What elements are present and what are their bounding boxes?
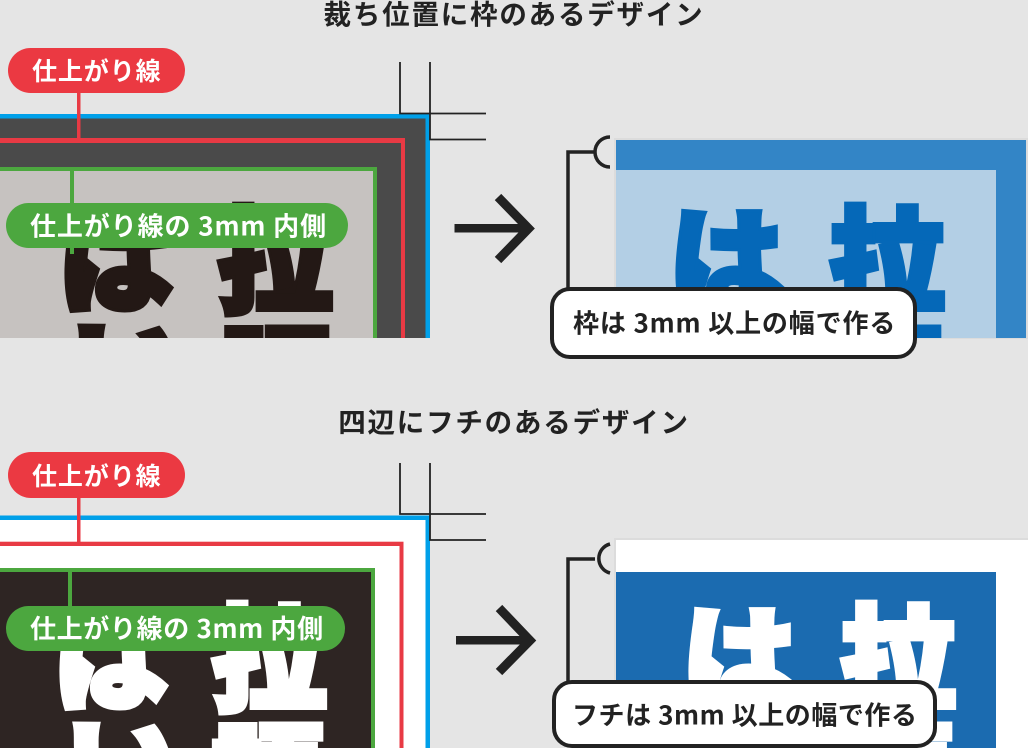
callout: top [552, 289, 915, 357]
large lettering: bottom sample [688, 600, 956, 748]
callout: top: 枠は 3mm 以上の幅で作る [573, 304, 896, 340]
arrow: bottom [456, 608, 530, 672]
panel: bottom artwork with bleed frame [0, 516, 430, 748]
label: red trim line bottom: 仕上がり線 [32, 457, 162, 493]
large lettering: top sample: 拉 [830, 171, 945, 337]
title: bottom heading: 四辺にフチのあるデザイン [338, 400, 690, 440]
panel: bottom finished sample [614, 538, 1028, 748]
large lettering: top sample: 語 [830, 291, 945, 457]
crop marks: bottom [400, 463, 486, 540]
large lettering: top sample: は [669, 171, 784, 337]
label: green inner line top: 仕上がり線の 3mm 内側 [30, 206, 327, 244]
large lettering: bottom artwork [59, 600, 328, 748]
large lettering: top artwork: い [70, 278, 185, 444]
large lettering: top sample [675, 202, 946, 338]
large lettering: bottom sample: 拉 [841, 569, 956, 735]
large lettering: top artwork: 語 [218, 291, 333, 457]
connector: green line top [70, 171, 74, 254]
large lettering: bottom artwork: 拉 [212, 569, 327, 735]
label: red trim line top: 仕上がり線 [32, 52, 162, 88]
label: red trim line bottom [8, 452, 185, 498]
large lettering: bottom sample: は [682, 569, 797, 735]
large lettering: top artwork [64, 202, 334, 338]
connector: red line bottom [77, 497, 80, 542]
label: green inner line bottom: 仕上がり線の 3mm 内側 [30, 609, 324, 646]
connector: green line bottom [68, 572, 72, 607]
large lettering: top artwork: は [58, 171, 173, 337]
bracket: bottom callout leader [568, 544, 610, 684]
connector: red line top [77, 92, 80, 139]
large lettering: bottom artwork: は [53, 569, 168, 735]
bracket: top callout leader [568, 137, 610, 290]
label: red trim line top [8, 48, 185, 93]
callout: bottom [554, 682, 935, 746]
arrow: top [454, 197, 529, 260]
panel: top finished sample [614, 138, 1028, 339]
large lettering: top artwork: 拉 [218, 171, 333, 337]
panel: top artwork with bleed frame [0, 114, 430, 338]
crop marks: top [400, 62, 486, 140]
callout: bottom: フチは 3mm 以上の幅で作る [572, 696, 918, 732]
